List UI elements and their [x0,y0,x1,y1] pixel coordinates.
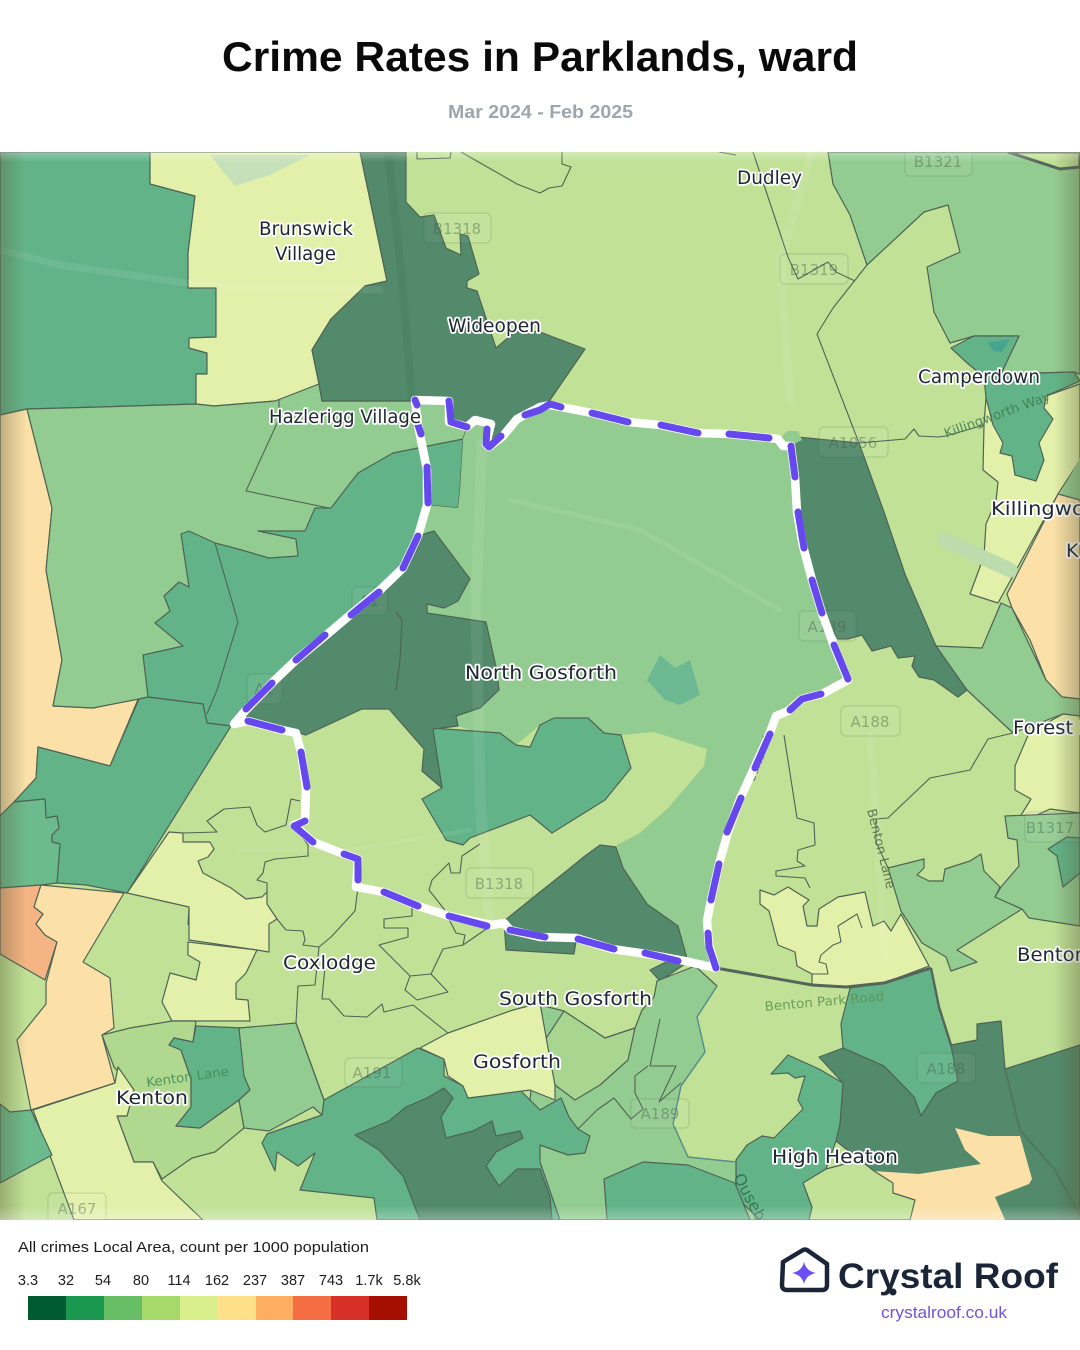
east boundary line [931,968,951,1045]
area: Forest Hall light green [936,603,1080,733]
road badge: A1056: A1056 [829,434,877,452]
street labels: Ouseburn [729,1170,783,1247]
legend colour ramp [28,1296,407,1320]
area: High Heaton mid green [736,1055,843,1220]
area: Ouseburn valley light green [530,966,760,1220]
road badge: A167: A167 [58,1200,96,1218]
street labels: Killingworth Way [942,389,1053,442]
area: top right corner [1008,152,1080,169]
road badge: A1 upper: A1 [359,592,379,610]
area: Brunswick Village [150,152,387,406]
ward boundary: white base line [234,400,848,968]
ward boundary: purple dashes [246,400,848,968]
area: Kenton pale [33,1067,203,1220]
road badge: B1319: B1319 [790,261,838,279]
lake [945,540,1010,570]
area: west edge mid green [0,799,60,888]
place label: Hazlerigg Village: Hazlerigg Village [269,406,421,428]
area: north-west green [0,152,216,415]
road badge: A189 south [631,1099,689,1128]
street labels: Salters Lane [744,711,785,783]
legend scale values: 387 [281,1273,305,1289]
place label: Brunswick Village: Brunswick [259,218,353,240]
legend heading: All crimes Local Area, count per 1000 population [18,1239,369,1256]
area: east dark [791,437,967,697]
small junction area [782,431,802,444]
street labels: Kenton Lane [145,1065,230,1091]
area: south dark [355,1088,552,1220]
icon: house with sparkle [782,1250,827,1290]
road badge: B1318 north: B1318 [433,220,481,238]
street labels: Benton Park Road [764,990,885,1015]
road badge: A189 north [799,611,856,641]
area: South Gosforth light green [545,1011,635,1100]
road badge: A191: A191 [353,1064,391,1082]
legend scale values: 237 [243,1273,267,1289]
area: mid green east patch [1048,837,1080,887]
area: Kingston Park mid green [14,697,231,893]
area: North Gosforth dark [234,531,499,788]
place label: K (cropped): K [1066,540,1079,562]
road badge: B1317 [1025,812,1080,842]
area: south-west mid green [0,1104,52,1183]
area: Gosforth south mid green [604,1162,750,1220]
area: Benton Lane light green [888,854,1022,971]
road badge: B1318 south [466,868,533,898]
legend scale values: 114 [167,1273,191,1289]
road badge: A1056 [819,427,888,457]
area: High Heaton orange [874,1128,1032,1220]
wordmark: Crystal Roof [838,1257,1058,1296]
inner boundary [396,612,402,690]
legend scale values: 5.8k [393,1273,421,1289]
place label: High Heaton: High Heaton [772,1146,898,1168]
water feature inside ward [647,655,700,705]
legend scale values [18,1273,421,1289]
area: Fawdon pale 1 [127,832,277,952]
area: western high-rate edge [0,409,139,816]
road badge: A1 lower [247,674,282,704]
water patch [987,339,1010,352]
legend scale values: 32 [58,1273,74,1289]
area: A188 mid green [841,969,958,1116]
legend scale values: 162 [205,1273,229,1289]
area: ward light-green core [418,405,848,968]
road badge: B1319 [780,254,848,284]
area: Coxlodge light green [239,1023,324,1131]
legend scale values: 54 [95,1273,111,1289]
road badge: A167 [48,1193,106,1223]
road badge: A189 north: A189 [808,618,846,636]
title: Crime Rates in Parklands, ward [222,33,858,80]
place label: Brunswick Village [259,218,353,265]
area: Fawdon pale 2 [162,942,257,1021]
road badge: A191 [345,1058,402,1087]
legend scale values: 743 [319,1273,343,1289]
area: orange high crime [0,885,57,980]
area: Killingworth pale [970,384,1080,603]
road badge: A188 north [841,706,900,736]
road badge: A189 south: A189 [641,1105,679,1123]
map edge vignette [0,152,1080,1220]
place label: Camperdown: Camperdown [918,366,1040,388]
small corner [1060,458,1080,500]
subtitle: date range: Mar 2024 - Feb 2025 [448,101,633,122]
legend [18,1239,421,1320]
inner pale boundary [812,914,862,974]
road badge: A188 north: A188 [851,713,889,731]
area: Benton pale [760,887,929,987]
area: Gosforth pale [420,1003,555,1100]
area: Fawdon orange pale [17,885,124,1110]
website: crystalroof.co.uk [881,1304,1008,1322]
place label: Gosforth: Gosforth [473,1051,561,1073]
road badge: A188 south [917,1053,975,1083]
road badge: A188 south: A188 [927,1060,965,1078]
area: Forest Hall pale [1015,714,1080,825]
roads: faint strips [0,152,885,960]
road badge: B1317: B1317 [1026,819,1074,837]
legend scale values: 3.3 [18,1273,38,1289]
area: south of ward dark [504,845,688,981]
street labels: Benton Lane [863,807,898,891]
place label: Kenton: Kenton [116,1087,188,1109]
place label: Coxlodge: Coxlodge [283,952,376,974]
area: north-east light green [828,152,1080,374]
area: Kenton light [102,1021,244,1179]
road badge: B1318 north [424,213,491,243]
area: Heaton dark [819,1021,1080,1220]
logo [782,1250,1058,1322]
map base [0,152,1080,1220]
area: Benton east light green [995,813,1080,926]
legend scale values: 80 [133,1273,149,1289]
area: Killingworth orange [1007,494,1080,699]
road badge: B1321 [905,146,972,176]
boundary in dark [1005,1069,1080,1215]
place label: Wideopen: Wideopen [448,315,541,337]
road corridor [388,152,412,400]
place label: North Gosforth: North Gosforth [465,662,617,684]
area: south centre mid green [262,1048,590,1220]
legend scale values: 1.7k [355,1273,383,1289]
area: Kenton Lane mid green [169,1026,250,1128]
area: Camperdown mid green [951,336,1080,481]
boundary lines: southern neighbourhoods [183,152,1013,1129]
road badge: A1 lower: A1 [254,680,274,698]
Benton Park Road boundary [716,968,931,987]
road badge: B1318 south: B1318 [475,875,523,893]
area: ward south mid green [422,718,631,845]
ponds [210,155,310,186]
place label: South Gosforth: South Gosforth [499,988,652,1010]
road badge: A1 upper [352,587,387,615]
area: Wideopen dark [312,152,585,447]
place label: Brunswick Village: Village [275,243,336,265]
area: west of A1 [143,439,463,726]
street labels [145,389,1053,1247]
road badge: B1321: B1321 [914,153,962,171]
area: Hazlerigg [27,384,467,726]
place label: Dudley: Dudley [737,167,802,189]
river [673,986,736,1162]
area: High Heaton south light [803,1160,915,1220]
